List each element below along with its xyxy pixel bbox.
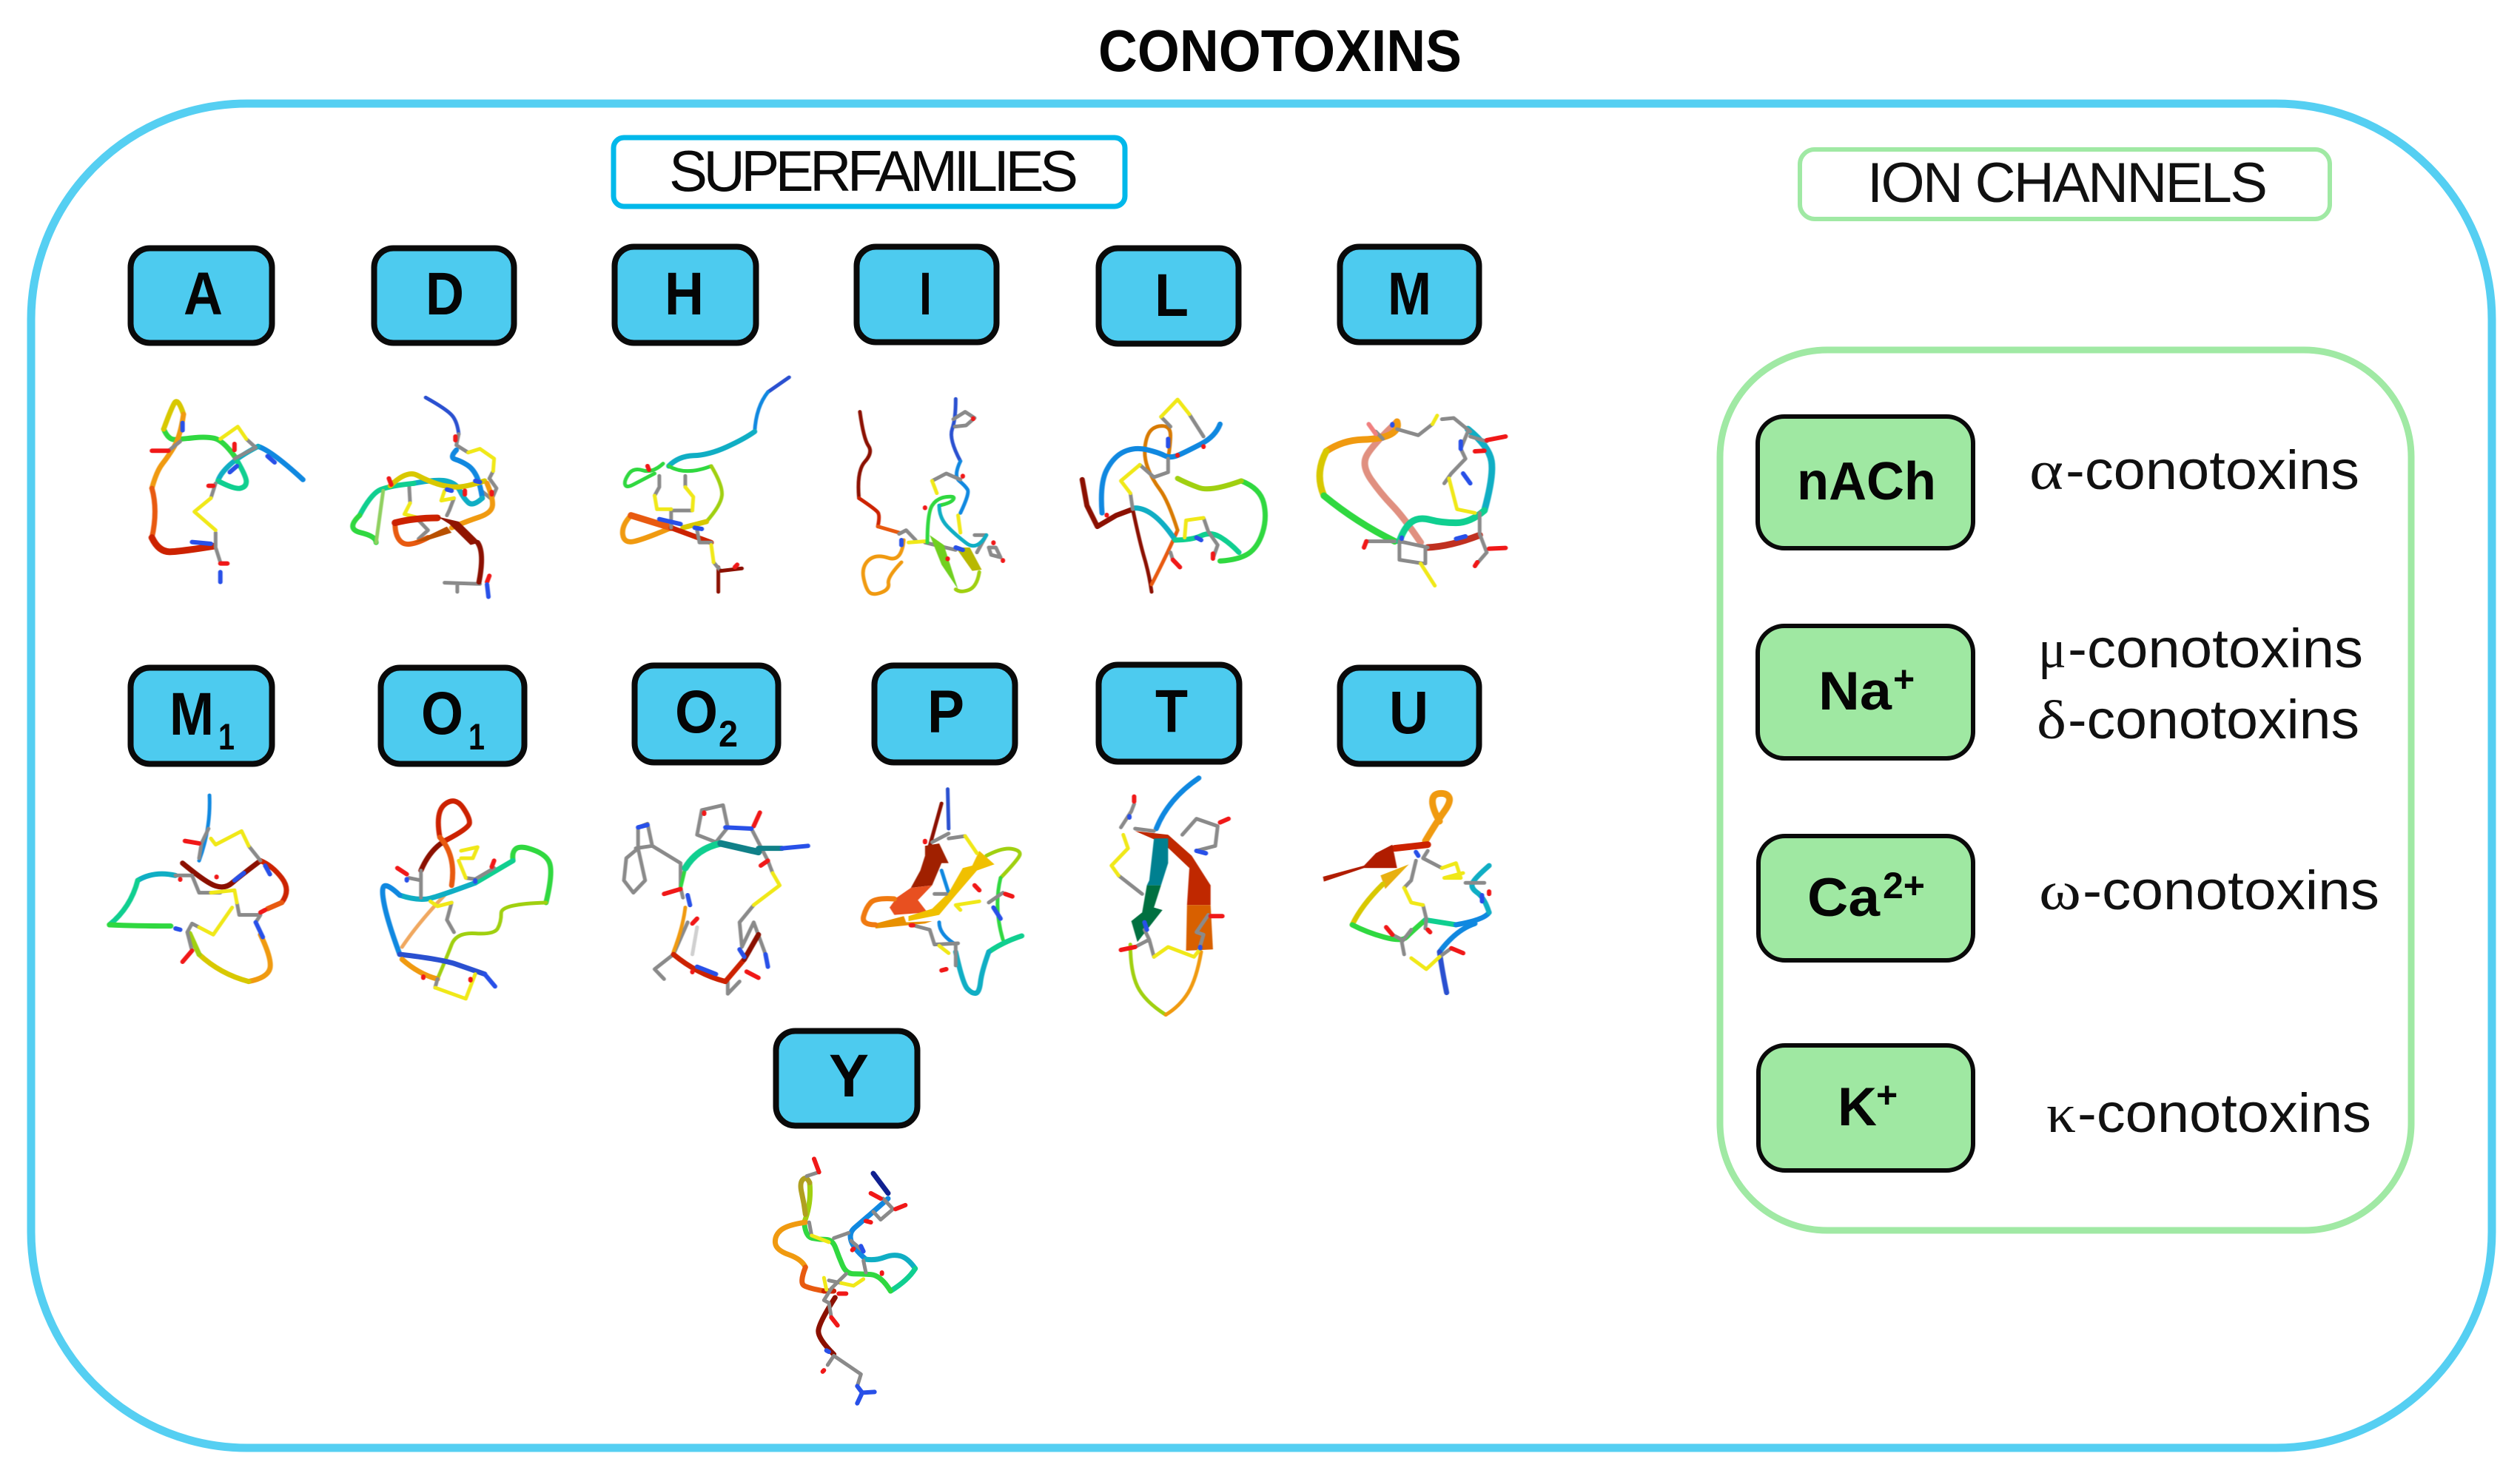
icon: A structure — [152, 402, 303, 582]
heading: superfamilies: SUPERFAMILIES — [669, 138, 1078, 203]
box: K+: K — [1838, 1077, 1877, 1137]
box: Ca2+ — [1758, 836, 1973, 960]
icon: P structure — [864, 789, 1022, 994]
label: omega-conotoxins: -conotoxins — [2083, 860, 2379, 921]
icon: D structure — [353, 397, 497, 597]
box: nACh — [1758, 417, 1973, 548]
label: kappa-conotoxins: κ — [2046, 1084, 2076, 1145]
box: Y — [776, 1031, 918, 1126]
title: CONOTOXINS — [1098, 18, 1462, 84]
label: alpha-conotoxins: α — [2029, 441, 2063, 502]
box: O1: O — [421, 680, 463, 747]
icon: U structure — [1323, 793, 1489, 993]
box: L — [1098, 249, 1239, 343]
box: M1: M — [169, 681, 214, 748]
box: A — [130, 249, 272, 343]
label: mu-conotoxins: μ — [2038, 619, 2066, 680]
box: O1: 1 — [468, 716, 485, 758]
box: T — [1098, 664, 1239, 762]
box: M: M — [1388, 260, 1431, 328]
box: O2 — [635, 666, 779, 762]
icon: H structure — [622, 377, 789, 592]
box: T: T — [1155, 678, 1188, 745]
icon: Y structure — [775, 1159, 915, 1403]
box: H: H — [665, 260, 704, 328]
box: nACh: nACh — [1797, 452, 1936, 511]
icon: L structure — [1082, 400, 1266, 592]
box: D — [374, 249, 514, 343]
box: Ca2+: 2+ — [1883, 865, 1925, 906]
box: U: U — [1389, 679, 1428, 747]
label: omega-conotoxins: ω — [2039, 861, 2081, 922]
box: Na+: + — [1893, 658, 1915, 700]
box: M — [1340, 247, 1479, 342]
icon: I structure — [859, 399, 1003, 594]
box: M1 — [130, 667, 272, 764]
box: P: P — [927, 678, 964, 746]
box: K+ — [1758, 1045, 1973, 1170]
box: I — [857, 247, 996, 342]
icon: M structure — [1320, 416, 1505, 586]
label: delta-conotoxins: -conotoxins — [2068, 689, 2359, 750]
box: P — [875, 666, 1015, 762]
icon: M1 structure — [110, 795, 286, 982]
box: L: L — [1155, 262, 1189, 329]
label: mu-conotoxins: -conotoxins — [2068, 618, 2363, 679]
icon: T structure — [1112, 778, 1229, 1015]
box: U — [1340, 667, 1479, 764]
box: Na+ — [1758, 626, 1973, 758]
box: Ca2+: Ca — [1807, 868, 1881, 928]
heading: ion channels — [1800, 149, 2330, 219]
label: delta-conotoxins: δ — [2037, 690, 2066, 751]
panel: ion channels — [1720, 149, 2411, 1230]
box: M1: 1 — [218, 716, 235, 758]
box: O2: O — [675, 678, 718, 746]
label: kappa-conotoxins: -conotoxins — [2077, 1082, 2371, 1144]
box: O2: 2 — [719, 713, 738, 755]
panel: superfamilies — [110, 138, 1505, 1403]
icon: O1 structure — [383, 801, 551, 999]
heading: ion channels: ION CHANNELS — [1867, 152, 2268, 215]
box: D: D — [426, 260, 464, 328]
box: Na+: Na — [1818, 661, 1892, 721]
panel: ion channel list — [1720, 350, 2411, 1230]
icon: O2 structure — [624, 805, 808, 994]
box: Y: Y — [829, 1042, 869, 1110]
label: alpha-conotoxins: -conotoxins — [2066, 439, 2359, 501]
box: H — [614, 247, 756, 343]
box: A: A — [184, 260, 223, 328]
box: I: I — [919, 260, 932, 328]
box: K+: + — [1876, 1074, 1898, 1116]
box: O1 — [380, 667, 524, 764]
